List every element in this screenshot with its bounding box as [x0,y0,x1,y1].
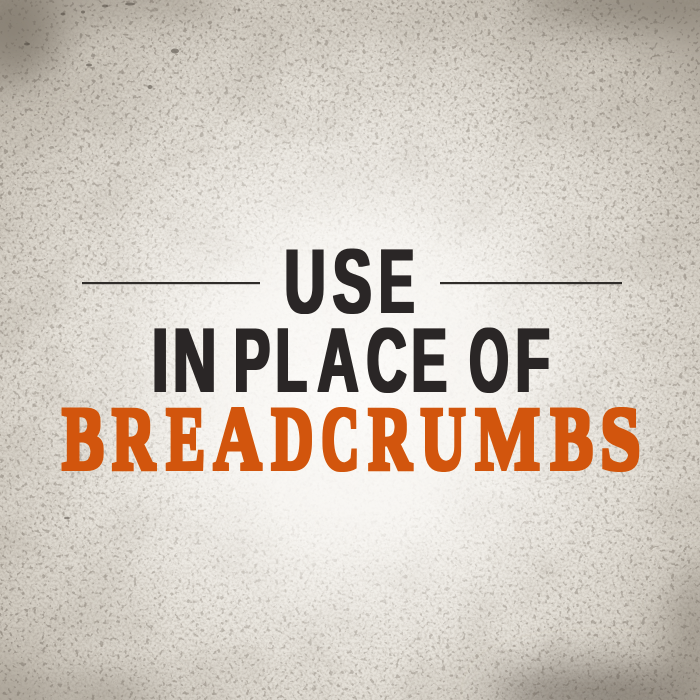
heading line: IN PLACE OF: F [515,311,550,412]
heading line: BREADCRUMBS: B [550,389,593,488]
heading line: BREADCRUMBS: D [271,390,313,489]
decorative rule: right [440,282,622,284]
heading line: IN PLACE OF: P [234,309,270,411]
heading line: IN PLACE OF [152,309,550,412]
heading line: IN PLACE OF: N [173,310,216,411]
heading line: IN PLACE OF: I [152,311,168,412]
heading line: BREADCRUMBS: C [321,389,359,488]
heading line: USE: E [379,231,414,332]
heading line: BREADCRUMBS: S [600,389,641,488]
heading line: IN PLACE OF: E [412,309,447,411]
heading line: BREADCRUMBS: R [368,391,413,488]
heading line: BREADCRUMBS: E [166,391,205,489]
heading line: USE: S [333,231,372,333]
heading line: BREADCRUMBS: U [420,389,466,488]
heading line: BREADCRUMBS: R [112,391,156,488]
heading line: BREADCRUMBS: M [475,390,540,489]
decorative rule: left [82,282,260,284]
heading line: IN PLACE OF: O [469,309,509,411]
heading line: BREADCRUMBS [62,389,641,489]
heading line: USE: U [285,231,326,333]
heading line: IN PLACE OF: L [276,309,307,411]
heading line: BREADCRUMBS: A [214,389,262,488]
heading line: BREADCRUMBS: B [62,390,104,488]
heading line: IN PLACE OF: A [318,310,359,412]
heading line: IN PLACE OF: C [367,309,407,411]
heading line: USE [285,231,414,333]
